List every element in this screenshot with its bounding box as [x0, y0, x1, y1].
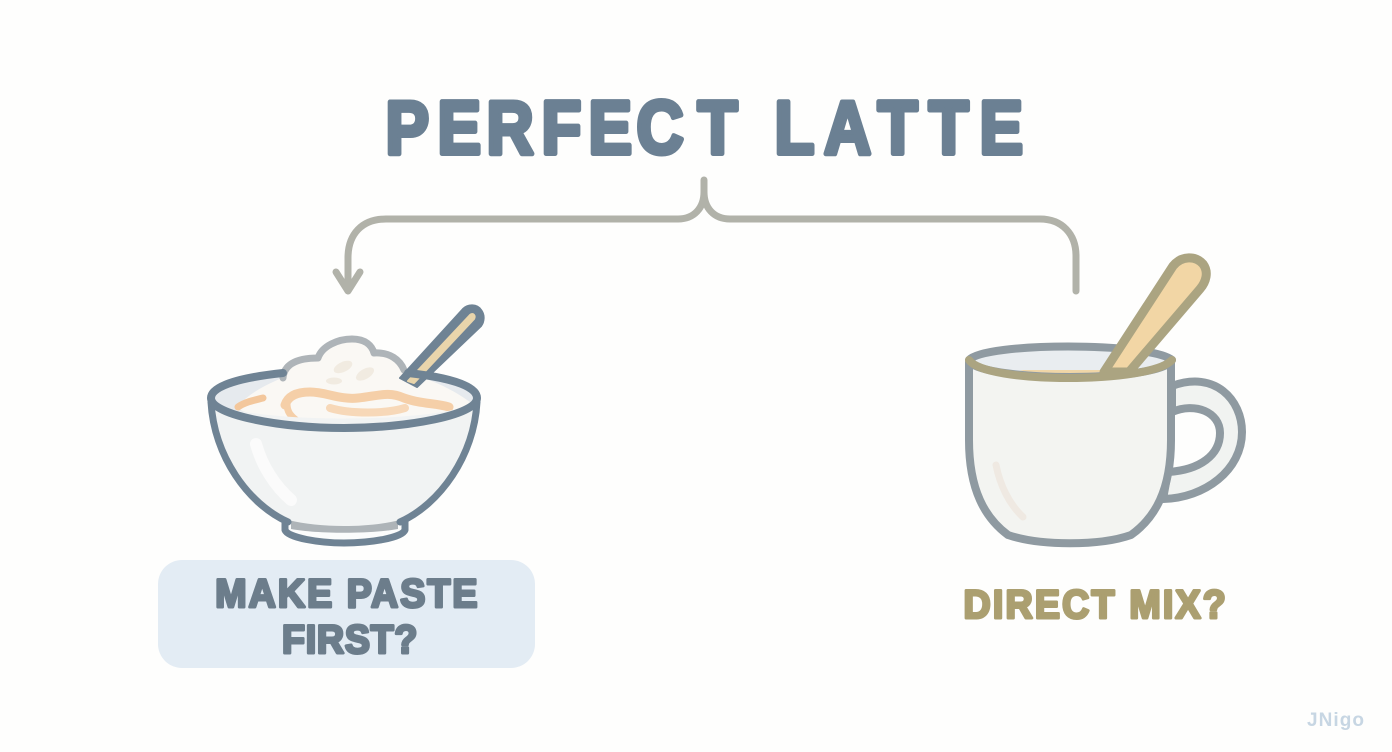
mug back rim — [969, 346, 1172, 360]
mug body — [969, 362, 1171, 543]
bowl highlight — [256, 444, 291, 500]
mug highlight — [996, 465, 1023, 517]
label: direct mix: DIRECT MIX? — [964, 583, 1226, 627]
mug front rim — [969, 360, 1172, 378]
bowl body — [211, 402, 477, 526]
caramel swirls — [238, 392, 449, 422]
watermark: JNigo — [1307, 710, 1364, 731]
label text line 2: FIRST? — [282, 618, 417, 662]
bowl right side — [400, 402, 477, 522]
paste mound — [236, 339, 470, 423]
spoon — [1104, 258, 1206, 372]
label pill: make paste first — [158, 560, 535, 668]
spoon — [400, 305, 484, 387]
bowl rim — [211, 373, 477, 428]
mug handle — [1163, 382, 1242, 499]
bowl foot — [285, 520, 405, 543]
icon: mug with spoon — [968, 258, 1242, 543]
label text line 1: MAKE PASTE — [215, 572, 478, 616]
paste highlights — [326, 358, 376, 384]
mug interior — [968, 347, 1172, 377]
bowl left side — [211, 402, 288, 522]
paste mound outline — [283, 339, 404, 378]
title: PERFECT LATTE — [385, 85, 1023, 170]
icon: bowl of paste with spoon — [211, 305, 484, 543]
bowl interior — [212, 371, 476, 425]
arrow: branching bracket to both options — [336, 180, 1076, 291]
